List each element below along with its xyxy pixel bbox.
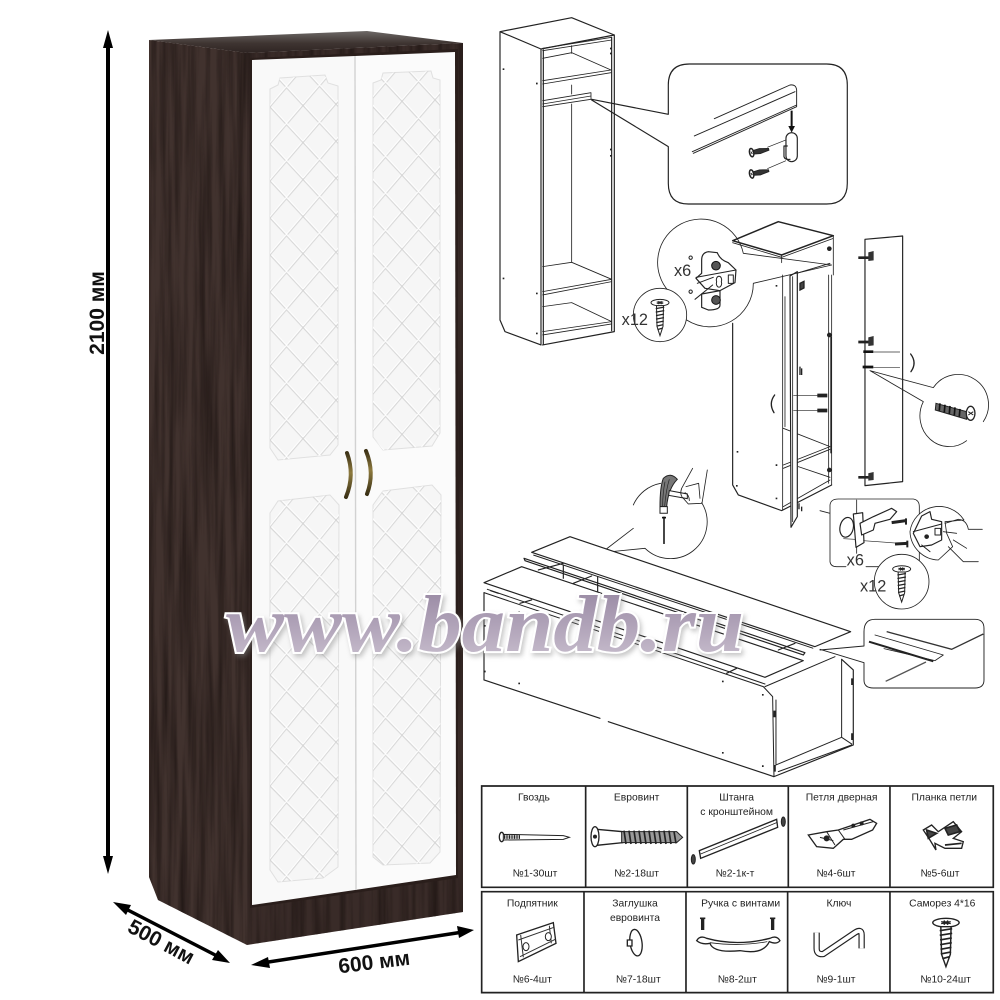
part: self-tapping screw [909, 899, 976, 986]
screw count bubble [874, 554, 929, 609]
parts table [482, 786, 993, 993]
right door [355, 52, 456, 890]
height arrow [103, 30, 113, 874]
diagram: lower hinge detail [820, 499, 984, 688]
lattice panel: left door lower [270, 495, 339, 882]
wardrobe side panel [149, 40, 247, 945]
part: hinge plate [912, 793, 977, 880]
width label: 600 мм [337, 947, 411, 978]
hinge bubble [820, 499, 919, 567]
right handle [366, 451, 371, 494]
lattice panel: left door upper [270, 75, 338, 460]
part: handle with screws: №8-2шт [718, 975, 757, 986]
back panel A [484, 567, 803, 677]
panel B lower edge [533, 555, 813, 648]
lattice panel: right door lower [373, 485, 441, 865]
hammer callout [602, 468, 707, 559]
depth label: 500 мм [124, 915, 198, 969]
left door [252, 56, 355, 905]
part: euroscrew: №2-18шт [614, 869, 659, 880]
back panel B [532, 537, 851, 647]
width arrow [251, 926, 474, 968]
lattice pattern: right door lower [373, 485, 441, 865]
part: screw cap: №7-18шт [616, 975, 661, 986]
rail detail [692, 85, 797, 179]
cabinet frame [500, 18, 614, 345]
part: handle with screws [697, 899, 780, 986]
x6 label: x6 [674, 262, 691, 280]
part: pivot plate [507, 899, 558, 986]
part: door hinge [806, 793, 878, 880]
part: euroscrew [591, 793, 683, 880]
part: screw cap [610, 899, 661, 986]
part: door hinge: №4-6шт [816, 869, 856, 880]
wardrobe top face [149, 31, 463, 53]
separate door [858, 236, 914, 486]
row 1 grid [482, 786, 993, 887]
x6 label: x6 [847, 551, 864, 569]
hinge callout [658, 219, 832, 327]
wardrobe front frame [247, 43, 463, 945]
part: screw cap: евровинта [610, 913, 660, 924]
part: nail: №1-30шт [513, 869, 558, 880]
part: pivot plate: №6-4шт [513, 975, 552, 986]
part: handle with screws: Ручка с винтами [701, 899, 780, 910]
left handle [346, 453, 351, 497]
diagram: cabinet lying flat with back panels [484, 537, 853, 777]
part: self-tapping screw: №10-24шт [920, 975, 971, 986]
part: hex key: Ключ [826, 899, 851, 910]
diagram: empty cabinet with rail detail [500, 18, 847, 345]
cup hinge [838, 508, 907, 547]
door gap [355, 56, 356, 890]
cabinet box [484, 589, 853, 777]
row 2 grid [482, 892, 993, 993]
lattice pattern: right door upper [373, 71, 440, 450]
part: euroscrew: Евровинт [614, 793, 660, 804]
watermark: www.bandb.ru [226, 581, 744, 669]
lattice panel: right door upper [373, 71, 440, 450]
diagram: cabinet with door hinges [602, 219, 989, 559]
lattice pattern: left door lower [270, 495, 339, 882]
part: pivot plate: Подпятник [507, 899, 558, 910]
cabinet body [733, 222, 833, 527]
height label: 2100 мм [86, 271, 109, 355]
part: hinge plate: Планка петли [912, 793, 977, 804]
inner shadow line around doors [250, 49, 458, 908]
part: nail [499, 793, 569, 880]
x12 label: x12 [860, 578, 886, 596]
depth arrow [113, 902, 230, 963]
part: rail with brackets: Штанга [719, 793, 754, 804]
x12 label: x12 [622, 311, 648, 329]
part: hex key: №9-1шт [816, 975, 856, 986]
screw count bubble [633, 288, 687, 342]
part: screw cap: Заглушка [612, 899, 658, 910]
rail section callout [820, 619, 984, 688]
part: door hinge: Петля дверная [806, 793, 878, 804]
hand bubble [910, 507, 982, 562]
part: hinge plate: №5-6шт [920, 869, 960, 880]
part: self-tapping screw: Саморез 4*16 [909, 899, 976, 910]
part: rail with brackets: с кронштейном [700, 807, 773, 818]
part: nail: Гвоздь [518, 793, 550, 804]
part: hex key [816, 899, 862, 986]
wardrobe photo [149, 31, 463, 945]
lattice pattern: left door upper [270, 75, 338, 460]
part: rail with brackets: №2-1к-т [716, 869, 755, 880]
callout bubble [592, 64, 847, 204]
part: rail with brackets [691, 793, 785, 880]
long screw callout [870, 371, 989, 447]
centre bar [491, 558, 805, 673]
